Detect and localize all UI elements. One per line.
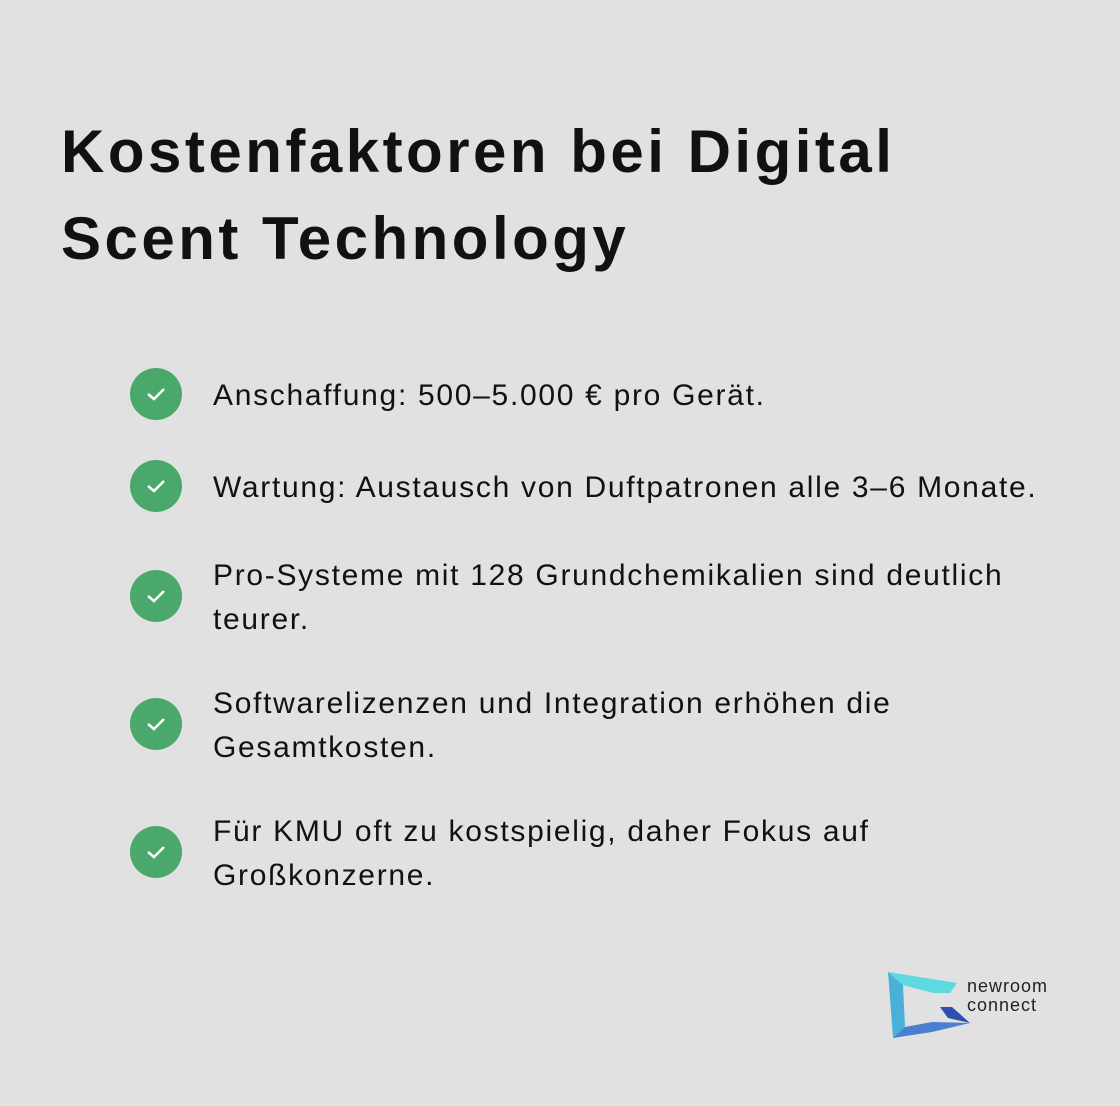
icon: check <box>130 698 182 750</box>
text: Gesamtkosten. <box>213 731 437 764</box>
title <box>61 118 895 272</box>
text: Wartung: Austausch von Duftpatronen alle 3–6 Monate. <box>213 471 1037 504</box>
text: Für KMU oft zu kostspielig, daher Fokus auf <box>213 815 870 848</box>
text <box>213 559 1003 636</box>
item 2 <box>130 460 1037 512</box>
item 5 <box>130 815 870 892</box>
logo <box>888 972 1048 1038</box>
text: Pro-Systeme mit 128 Grundchemikalien sind deutlich <box>213 559 1003 592</box>
icon: check <box>130 368 182 420</box>
item 3 <box>130 559 1003 636</box>
logo: connect <box>967 995 1037 1015</box>
text <box>213 815 870 892</box>
icon: check <box>130 460 182 512</box>
item 4 <box>130 687 892 764</box>
icon: check <box>130 570 182 622</box>
text: Anschaffung: 500–5.000 € pro Gerät. <box>213 379 766 412</box>
text: Softwarelizenzen und Integration erhöhen die <box>213 687 892 720</box>
logo: newroom <box>967 976 1048 996</box>
text <box>213 687 892 764</box>
item 1 <box>130 368 766 420</box>
title: Scent Technology <box>61 205 629 272</box>
text: Großkonzerne. <box>213 859 435 892</box>
title: Kostenfaktoren bei Digital <box>61 118 895 185</box>
icon: check <box>130 826 182 878</box>
text: teurer. <box>213 603 310 636</box>
